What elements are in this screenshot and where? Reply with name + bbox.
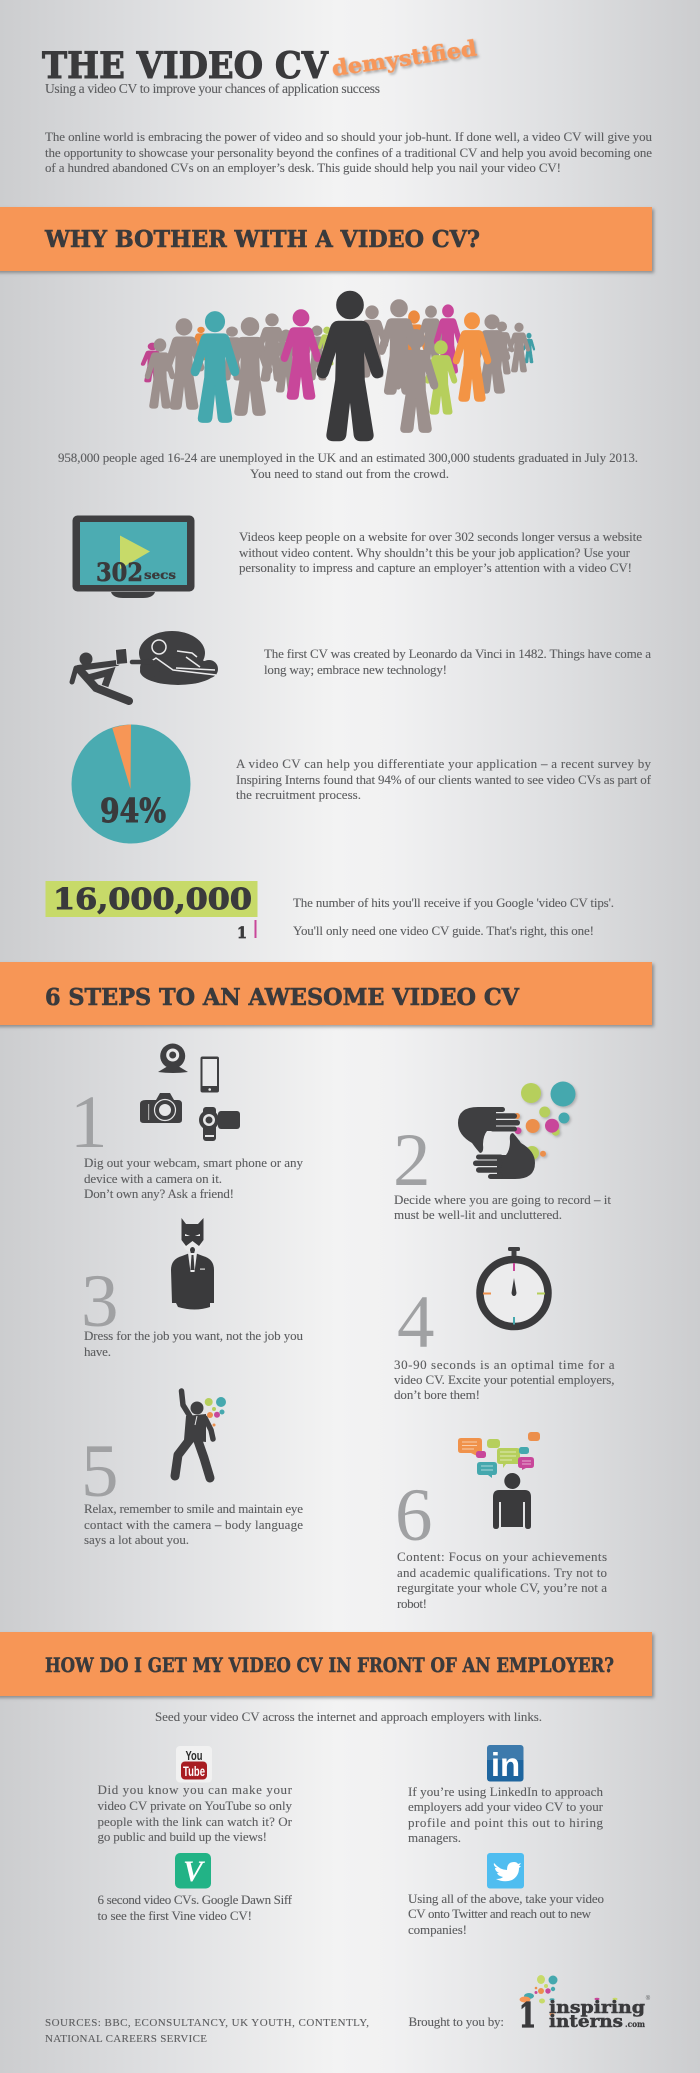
sources: NATIONAL CAREERS SERVICE: [45, 2033, 207, 2045]
step 4: [394, 1247, 615, 1402]
icon: YouTube: [176, 1746, 212, 1782]
step 3 text: [84, 1328, 304, 1359]
icon: person: [493, 1473, 531, 1529]
sources: SOURCES: BBC, ECONSULTANCY, UK YOUTH, CONTENTLY,: [45, 2017, 369, 2029]
text: 302 seconds: personality to impress and capture an employer’s attention with a video CV!: [239, 560, 632, 575]
step 1 text: device with a camera on it.: [84, 1171, 222, 1186]
icon: creation of Adam, handing over a CV: [72, 631, 218, 701]
icon: LinkedIn: in: [491, 1746, 520, 1783]
logo numeral: 1: [519, 1996, 536, 2036]
text: YouTube: [98, 1782, 293, 1844]
crowd caption: You need to stand out from the crowd.: [250, 466, 449, 481]
text: YouTube: video CV private on YouTube so only: [98, 1798, 292, 1813]
step number 1: 1: [70, 1081, 108, 1164]
step number 5: 5: [81, 1430, 118, 1513]
logo bubbles: [520, 1975, 618, 2016]
step 6 text: Content: Focus on your achievements: [397, 1549, 607, 1564]
icon: YouTube: Tube: [183, 1763, 205, 1779]
intro text: the opportunity to showcase your personality beyond the confines of a traditional CV and help you avoid becoming one: [45, 145, 652, 160]
stat: 1: 1: [237, 923, 247, 942]
step number 3: 3: [81, 1260, 118, 1343]
brought to you by: Brought to you by:: [408, 2014, 504, 2029]
icon: batman in a suit: [171, 1218, 214, 1310]
icon: Vine: V: [183, 1855, 206, 1888]
text: LinkedIn: employers add your video CV to your: [408, 1799, 604, 1814]
text: LinkedIn: If you’re using LinkedIn to approach: [408, 1784, 604, 1799]
step 1 text: Dig out your webcam, smart phone or any: [84, 1155, 304, 1170]
sources: [45, 2017, 369, 2045]
heading band: why bother: [0, 207, 652, 271]
heading band: 6 steps: 6 STEPS TO AN AWESOME VIDEO CV: [45, 984, 520, 1011]
logo wordmark: interns: [549, 2012, 623, 2032]
text: LinkedIn: managers.: [408, 1830, 461, 1845]
step 5 text: [84, 1501, 303, 1547]
icon: smart phone: [200, 1056, 219, 1092]
text: Vine: 6 second video CVs. Google Dawn Siff: [98, 1892, 293, 1907]
text: search hits: You'll only need one video CV guide. That's right, this one!: [293, 923, 594, 938]
text: Twitter: [408, 1891, 604, 1937]
text: YouTube: go public and build up the views!: [98, 1829, 267, 1844]
text: LinkedIn: [408, 1784, 604, 1845]
step 3 text: Dress for the job you want, not the job you: [84, 1328, 304, 1343]
icon: Vine: [175, 1853, 211, 1888]
pie chart 94%: [72, 724, 190, 844]
section intro text: Seed your video CV across the internet and approach employers with links.: [155, 1709, 542, 1724]
logo wordmark: ®: [646, 1995, 651, 2002]
icon: Twitter: [487, 1853, 524, 1888]
step number 4: 4: [397, 1281, 434, 1364]
text: 94 percent survey: the recruitment process.: [236, 787, 361, 802]
step 4 text: don’t bore them!: [394, 1387, 480, 1402]
icon: video screen 302 secs: [72, 516, 194, 598]
step 5: [81, 1391, 303, 1547]
step 5 text: says a lot about you.: [84, 1532, 189, 1547]
crowd illustration: [141, 292, 535, 440]
step 1: [70, 1044, 304, 1201]
text: YouTube: people with the link can watch it? Or: [98, 1814, 293, 1829]
icon: framing hands: [458, 1107, 535, 1179]
stat: 16,000,000: 16,000,000: [53, 882, 252, 916]
icon: stopwatch: [480, 1247, 548, 1326]
text: 302 seconds: Videos keep people on a website for over 302 seconds longer versus a website: [239, 529, 642, 544]
step 6 text: and academic qualifications. Try not to: [397, 1565, 607, 1580]
text: search hits: [293, 895, 614, 938]
text: Twitter: CV onto Twitter and reach out to new: [408, 1906, 592, 1921]
text: Twitter: Using all of the above, take your video: [408, 1891, 604, 1906]
text: search hits: The number of hits you'll receive if you Google 'video CV tips'.: [293, 895, 614, 910]
step 6 text: regurgitate your whole CV, you’re not a: [397, 1580, 607, 1595]
step number 2: 2: [393, 1119, 430, 1202]
text: first CV: [264, 646, 651, 677]
title accent: demystified: demystified: [330, 35, 479, 81]
step number 6: 6: [395, 1474, 432, 1557]
step 6 text: [397, 1549, 607, 1611]
step 3: [81, 1218, 304, 1359]
text: first CV: long way; embrace new technology!: [264, 662, 447, 677]
crowd caption: 958,000 people aged 16-24 are unemployed in the UK and an estimated 300,000 students graduated in July 2013.: [58, 450, 638, 465]
heading band: employer: [0, 1632, 652, 1696]
step 6 text: robot!: [397, 1596, 427, 1611]
step 3 text: have.: [84, 1344, 111, 1359]
icon: webcam: [158, 1044, 188, 1073]
text: first CV: The first CV was created by Leonardo da Vinci in 1482. Things have come a: [264, 646, 651, 661]
step 5 text: contact with the camera – body language: [84, 1517, 303, 1532]
text: Vine: to see the first Vine video CV!: [98, 1908, 252, 1923]
icon: dancing man with bubbles: [175, 1391, 226, 1478]
text: 302 seconds: without video content. Why shouldn’t this be your job application? Use your: [239, 545, 631, 560]
stat: 1: [237, 920, 256, 942]
icon: video screen 302 secs: 302: [96, 558, 143, 587]
logo wordmark: .com: [625, 2019, 645, 2029]
text: 94 percent survey: Inspiring Interns found that 94% of our clients wanted to see video CVs as part of: [236, 772, 652, 787]
title: THE VIDEO CV: [42, 45, 329, 87]
step 5 text: Relax, remember to smile and maintain eye: [84, 1501, 303, 1516]
icon: speech bubbles: [458, 1432, 540, 1478]
step 2 text: [394, 1192, 611, 1222]
pie chart 94%: 94%: [100, 791, 166, 830]
step 4 text: 30-90 seconds is an optimal time for a: [394, 1357, 615, 1372]
intro text: [45, 129, 652, 175]
step 2 text: Decide where you are going to record – it: [394, 1192, 611, 1207]
step 2 text: must be well-lit and uncluttered.: [394, 1207, 562, 1222]
icon: camera: [140, 1093, 182, 1123]
text: LinkedIn: profile and point this out to hiring: [408, 1815, 604, 1830]
step 6: [395, 1432, 607, 1611]
heading band: why bother: WHY BOTHER WITH A VIDEO CV?: [44, 226, 480, 253]
crowd caption: [58, 450, 638, 481]
text: Vine: [98, 1892, 293, 1923]
text: 94 percent survey: A video CV can help you differentiate your application – a recent survey by: [236, 756, 652, 771]
logo: Inspiring Interns: [519, 1975, 651, 2036]
heading band: 6 steps: [0, 962, 652, 1025]
step 4 text: video CV. Excite your potential employers,: [394, 1372, 614, 1387]
intro text: of a hundred abandoned CVs on an employer’s desk. This guide should help you nail your video CV!: [45, 160, 561, 175]
icon: video screen 302 secs: secs: [144, 568, 176, 582]
icon: camcorder: [199, 1107, 240, 1141]
text: YouTube: Did you know you can make your: [98, 1782, 293, 1797]
logo wordmark: inspiring: [549, 1998, 645, 2018]
step 1 text: Don’t own any? Ask a friend!: [84, 1186, 234, 1201]
text: 302 seconds: [239, 529, 642, 575]
icon: YouTube: You: [186, 1748, 203, 1763]
text: Twitter: companies!: [408, 1922, 467, 1937]
step 1 text: [84, 1155, 304, 1201]
title: [42, 35, 479, 87]
icon: colour bubbles: [514, 1082, 576, 1160]
logo wordmark: [549, 1995, 651, 2032]
text: 94 percent survey: [236, 756, 652, 802]
step 4 text: [394, 1357, 615, 1402]
subtitle: Using a video CV to improve your chances of application success: [45, 81, 380, 96]
intro text: The online world is embracing the power of video and so should your job-hunt. If done well, a video CV will give you: [45, 129, 652, 144]
step 2: [393, 1082, 611, 1222]
